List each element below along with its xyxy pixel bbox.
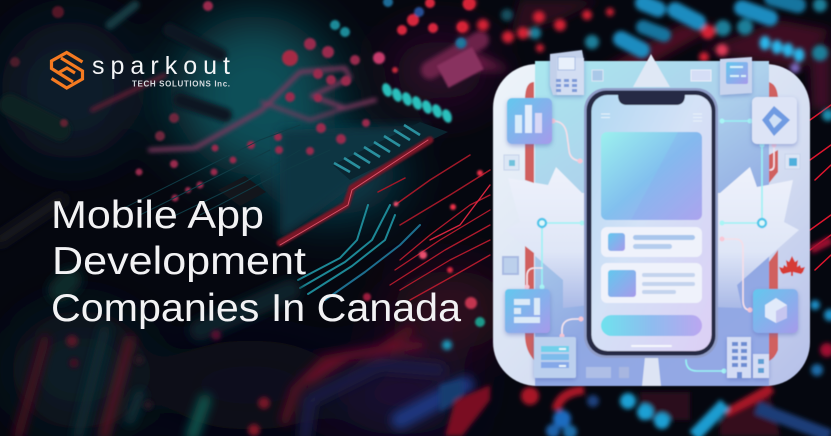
circuit traces — [120, 105, 831, 300]
logo wordmark: sparkout — [92, 52, 230, 80]
icon: layout tile — [505, 289, 550, 333]
icon: diamond tile — [752, 97, 797, 144]
small rectangle top — [691, 70, 711, 81]
icon: hexagon S mark — [52, 52, 82, 88]
blurred shapes lower — [0, 200, 465, 436]
title: Mobile App — [51, 194, 264, 237]
small square top — [592, 70, 603, 81]
icon: Canadian maple leaf — [779, 256, 805, 276]
icon: office building top left — [550, 50, 584, 95]
phone notch — [618, 95, 685, 105]
home indicator — [631, 345, 672, 347]
icon: cube tile — [753, 289, 798, 333]
icon: buildings bottom right — [727, 337, 769, 378]
icon: card chip top right — [720, 57, 752, 95]
icon: bar chart tile — [507, 98, 552, 144]
connector lines — [527, 121, 774, 371]
icon: server tile — [534, 337, 576, 378]
list card one — [601, 227, 702, 257]
phone — [584, 88, 718, 358]
small square bottom — [619, 367, 629, 378]
gradient button — [601, 315, 702, 336]
chip teal pins — [380, 82, 454, 124]
small square lower left — [503, 257, 518, 274]
logo — [52, 52, 230, 88]
title — [51, 194, 462, 330]
bokeh around card, bottom — [440, 240, 831, 436]
blurred dots upper — [10, 0, 484, 202]
blurred traces upper — [10, 5, 480, 150]
menu glyphs — [601, 114, 702, 121]
bokeh around card, top — [456, 0, 831, 121]
hero tile — [601, 132, 702, 220]
dark maroon upper band — [440, 0, 831, 110]
connector nodes — [538, 219, 766, 227]
title: Companies In Canada — [51, 287, 462, 330]
maple leaf right lobe — [712, 167, 799, 308]
logo tagline: TECH SOLUTIONS Inc. — [132, 80, 230, 88]
title: Development — [52, 240, 306, 283]
maple leaf left lobe — [505, 167, 590, 308]
app icon illustration — [493, 50, 810, 386]
chip dark body — [218, 122, 448, 206]
panel: inner blue field — [535, 61, 769, 386]
small square left — [504, 155, 519, 170]
phone outer frame — [584, 88, 718, 358]
maple leaf top point — [633, 54, 670, 87]
red stripes — [525, 82, 778, 361]
list card two — [601, 263, 702, 303]
small square right — [785, 154, 800, 169]
panel: rounded card base — [493, 64, 810, 386]
maple leaf stem — [642, 357, 661, 386]
teal circuit board plate — [280, 125, 430, 240]
phone body — [586, 90, 716, 356]
small bar bottom — [586, 367, 611, 378]
phone screen — [592, 95, 712, 351]
